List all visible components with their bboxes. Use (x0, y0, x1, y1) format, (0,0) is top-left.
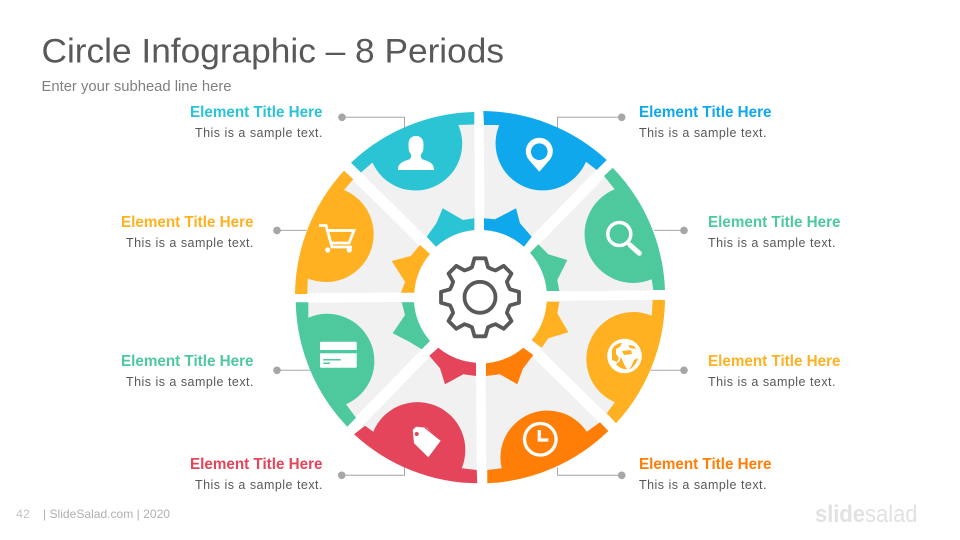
footer text: | SlideSalad.com | 2020 (43, 507, 170, 521)
page number: 42 (16, 507, 30, 521)
label: teal (190, 104, 323, 140)
circle diagram (285, 100, 675, 495)
segment: red (354, 402, 477, 483)
label: green left (121, 353, 254, 389)
segment: teal (351, 112, 474, 191)
label: yellow right: This is a sample text. (708, 375, 836, 389)
label: green right: Element Title Here (708, 214, 841, 231)
inner gear segments (392, 208, 568, 384)
label: orange: This is a sample text. (639, 478, 766, 492)
icon: clock (524, 424, 556, 455)
segment: green left (296, 302, 374, 427)
label: yellow left: This is a sample text. (126, 236, 254, 250)
label: blue: Element Title Here (639, 104, 772, 121)
leader: red (338, 468, 404, 479)
leader: yellow left (273, 227, 307, 234)
label: green left: Element Title Here (121, 353, 254, 370)
icon: globe (607, 339, 642, 373)
label: green right: This is a sample text. (708, 236, 836, 250)
title: Circle Infographic – 8 Periods (42, 32, 504, 70)
segment: green right (585, 168, 665, 290)
icon: central gear (441, 258, 519, 336)
label: red (190, 456, 323, 492)
logo: slidesalad (815, 501, 918, 528)
segment: orange (487, 411, 608, 483)
icon: cart (319, 226, 354, 253)
segment: yellow left (295, 171, 374, 294)
icon: person (398, 136, 434, 170)
label: green right (708, 214, 841, 250)
icon: tag (413, 427, 441, 457)
label: blue (639, 104, 772, 140)
white hub (413, 230, 547, 364)
label: orange (639, 456, 772, 492)
subhead: Enter your subhead line here (42, 79, 232, 95)
segment: blue (483, 111, 607, 190)
label: yellow right (708, 353, 841, 389)
icon: magnifier (608, 222, 639, 253)
leader: blue (558, 114, 626, 128)
label: yellow right: Element Title Here (708, 353, 841, 370)
icon: credit card (320, 342, 357, 368)
leader: green left (273, 366, 311, 374)
grey wedge background (285, 100, 675, 495)
leader: orange (558, 468, 626, 479)
label: green left: This is a sample text. (126, 375, 254, 389)
leader: yellow right (651, 366, 688, 374)
leader: teal (338, 114, 404, 128)
label: orange: Element Title Here (639, 456, 772, 473)
label: red: This is a sample text. (195, 478, 322, 492)
leader: green right (654, 227, 688, 234)
label: yellow left: Element Title Here (121, 214, 254, 231)
label: blue: This is a sample text. (639, 126, 766, 140)
label: yellow left (121, 214, 254, 250)
icon: location pin (526, 138, 553, 172)
label: teal: Element Title Here (190, 104, 323, 121)
label: teal: This is a sample text. (195, 126, 322, 140)
label: red: Element Title Here (190, 456, 323, 473)
segment: yellow right (586, 300, 665, 423)
